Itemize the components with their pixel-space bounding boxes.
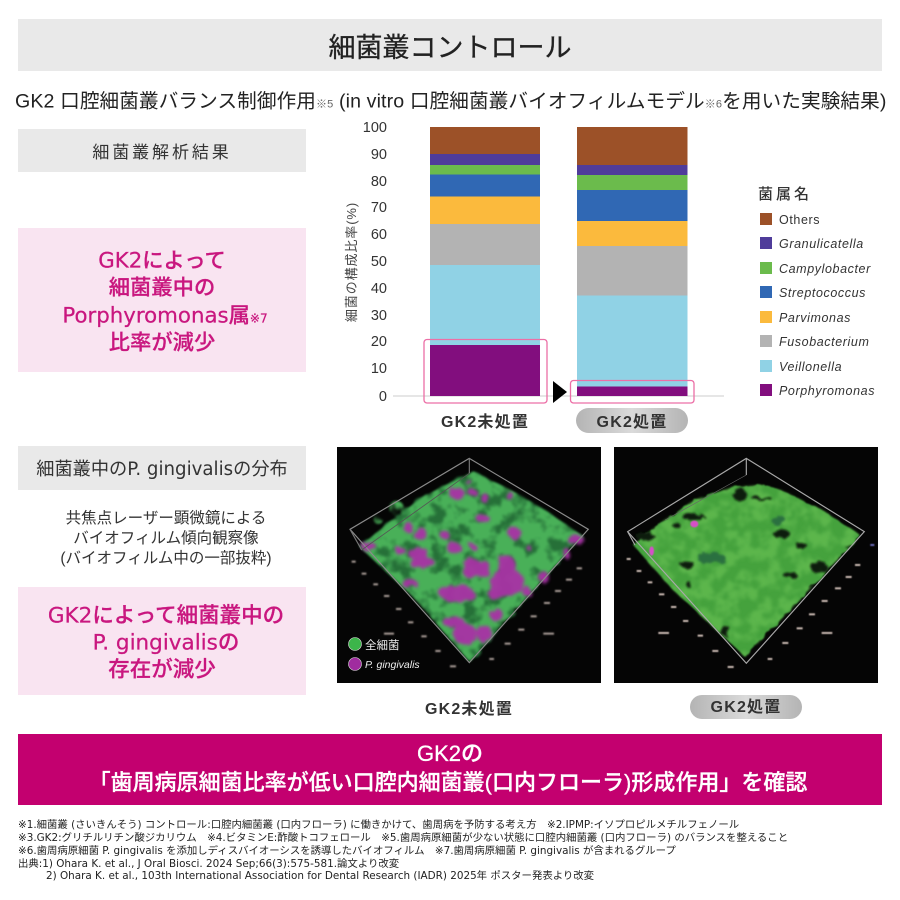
heading: microbiome analysis: 細菌叢解析結果 <box>92 143 232 162</box>
small magenta spots <box>649 521 698 556</box>
heading: distribution of P. gingivalis: 細菌叢中のP. gingivalisの分布 <box>36 459 288 480</box>
micrograph: GK2 untreated <box>337 447 601 683</box>
legend: Campylobacter <box>779 262 871 276</box>
conclusion banner <box>18 734 882 805</box>
conclusion banner: GK2の <box>417 741 483 766</box>
y axis tick labels: 70 <box>371 200 387 216</box>
y axis tick labels: 60 <box>371 227 387 243</box>
callout: Porphyromonas reduced: Porphyromonas属※7 <box>62 304 268 328</box>
stacked bar chart <box>344 120 875 433</box>
micrograph: GK2 treated <box>614 447 878 683</box>
label: GK2 untreated: GK2未処置 <box>441 413 529 431</box>
legend: Granulicatella <box>779 237 864 251</box>
pill label: GK2 treated image: GK2処置 <box>711 699 781 716</box>
magenta P. gingivalis clusters <box>361 479 583 645</box>
legend <box>758 186 875 398</box>
highlight box: treated <box>570 380 694 403</box>
footnotes: ※1.細菌叢 (さいきんそう) コントロール:口腔内細菌叢 (口内フローラ) に働きかけて、歯周病を予防する考え方 ※2.IPMP:イソプロピルメチルフェノール <box>18 819 739 831</box>
y axis tick labels <box>363 120 387 405</box>
bar: GK2 treated <box>577 127 688 396</box>
legend: P. gingivalis <box>348 658 420 671</box>
heading: microbiome analysis <box>18 129 306 172</box>
green biofilm <box>360 472 583 662</box>
text: confocal microscopy description <box>60 510 272 567</box>
arrow <box>553 381 567 403</box>
legend: total bacteria <box>348 638 400 652</box>
axis tick marks <box>352 561 582 667</box>
dark gaps in biofilm <box>635 488 855 635</box>
pill label: GK2 treated <box>576 408 688 433</box>
y axis title: 細菌の構成比率(%) <box>344 202 359 322</box>
green biofilm <box>633 485 860 657</box>
callout: P. gingivalis reduced: GK2によって細菌叢中の <box>48 604 284 628</box>
callout: Porphyromonas reduced <box>18 228 306 372</box>
darker green patches <box>698 515 785 564</box>
legend: Others <box>779 213 820 227</box>
callout: Porphyromonas reduced: 細菌叢中の <box>109 276 215 300</box>
y axis tick labels: 80 <box>371 174 387 190</box>
callout: P. gingivalis reduced: P. gingivalisの <box>93 630 239 656</box>
pill label: GK2 treated image <box>690 695 802 719</box>
legend: Streptococcus <box>779 286 866 300</box>
callout: P. gingivalis reduced: 存在が減少 <box>108 658 216 682</box>
legend: Parvimonas <box>779 311 851 325</box>
footnotes: ※3.GK2:グリチルリチン酸ジカリウム ※4.ビタミンE:酢酸トコフェロール ※5.歯周病原細菌が少ない状態に口腔内細菌叢 (口内フローラ) のバランスを整えること <box>18 832 788 844</box>
footnotes <box>18 819 788 882</box>
pill label: GK2 treated: GK2処置 <box>597 413 667 431</box>
footnotes: 2) Ohara K. et al., 103th International Association for Dental Research (IADR) 2025年 ポスター発表より改変 <box>46 870 594 882</box>
y axis tick labels: 100 <box>363 120 387 136</box>
y axis tick labels: 90 <box>371 147 387 163</box>
footnotes: 出典:1) Ohara K. et al., J Oral Biosci. 2024 Sep;66(3):575-581.論文より改変 <box>18 858 399 870</box>
bar: GK2 untreated <box>430 127 540 396</box>
title: 細菌叢コントロール <box>328 32 572 62</box>
y axis tick labels: 50 <box>371 254 387 270</box>
legend: Veillonella <box>779 360 842 374</box>
y axis tick labels: 10 <box>371 361 387 377</box>
conclusion banner: 「歯周病原細菌比率が低い口腔内細菌叢(口内フローラ)形成作用」を確認 <box>89 770 807 795</box>
legend: Fusobacterium <box>779 335 869 349</box>
text: confocal microscopy description: 共焦点レーザー顕微鏡による <box>66 510 266 527</box>
3D box frame <box>628 458 864 663</box>
text: confocal microscopy description: バイオフィルム傾向観察像 <box>73 530 259 547</box>
y axis tick labels: 40 <box>371 281 387 297</box>
label: GK2 untreated image: GK2未処置 <box>425 701 513 718</box>
callout: P. gingivalis reduced <box>18 587 306 695</box>
highlight box: untreated <box>424 340 547 403</box>
legend: P. gingivalis: P. gingivalis <box>365 659 420 671</box>
axis tick marks <box>627 544 874 668</box>
legend title: 菌属名 <box>758 186 812 203</box>
heading: distribution of P. gingivalis <box>18 446 306 490</box>
y axis tick labels: 0 <box>379 389 387 405</box>
legend: Porphyromonas <box>779 384 875 398</box>
callout: Porphyromonas reduced: GK2によって <box>98 248 226 274</box>
text: confocal microscopy description: (バイオフィルム中の一部抜粋) <box>60 550 272 567</box>
legend: total bacteria: 全細菌 <box>365 638 400 652</box>
subtitle: GK2 口腔細菌叢バランス制御作用※5 (in vitro 口腔細菌叢バイオフィルムモデル※6を用いた実験結果) <box>15 90 886 112</box>
y axis tick labels: 30 <box>371 308 387 324</box>
footnotes: ※6.歯周病原細菌 P. gingivalis を添加しディスバイオーシスを誘導したバイオフィルム ※7.歯周病原細菌 P. gingivalis が含まれるグループ <box>18 845 676 857</box>
y axis tick labels: 20 <box>371 334 387 350</box>
title <box>18 19 882 71</box>
3D box frame <box>350 458 588 663</box>
callout: Porphyromonas reduced: 比率が減少 <box>109 330 215 356</box>
